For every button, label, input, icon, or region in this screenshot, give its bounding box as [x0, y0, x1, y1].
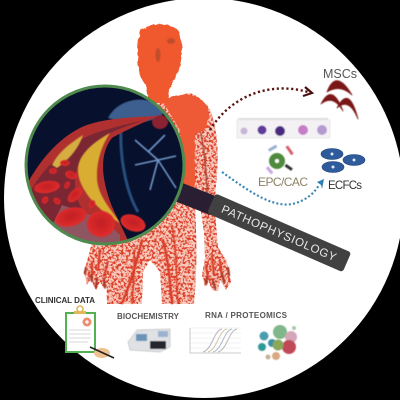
lens scene — [28, 88, 182, 242]
RNA / proteomics label: RNA / PROTEOMICS — [205, 311, 288, 320]
dotted arrow: to MSCs — [210, 87, 312, 130]
icon: ECFC cells — [321, 148, 365, 172]
human vascular figure — [84, 25, 231, 304]
magnifier lens — [20, 85, 190, 250]
icon: biochemistry analyser — [128, 329, 170, 352]
blood vessel wall — [26, 116, 158, 250]
magnifier handle — [172, 182, 218, 215]
icon: EPC/CAC cell — [266, 145, 294, 174]
body veins — [84, 93, 231, 304]
vessel lumen — [32, 120, 144, 222]
pathophysiology label — [207, 193, 351, 272]
icon: clipboard — [66, 306, 114, 358]
biochemistry label: BIOCHEMISTRY — [117, 312, 180, 321]
icon: proteomics network — [258, 325, 297, 360]
chart: amplification curves — [190, 328, 241, 353]
lower lumen tint — [54, 205, 120, 242]
head and neck — [138, 25, 182, 103]
shoulder mass — [163, 94, 210, 190]
pathophysiology label: PATHOPHYSIOLOGY — [219, 203, 338, 264]
MSCs label: MSCs — [323, 67, 357, 81]
icon: MSC cells — [321, 81, 358, 119]
red blood cells — [33, 160, 148, 237]
body base tint — [84, 93, 231, 304]
blood cell micrograph panel — [237, 118, 330, 138]
EPC/CAC label: EPC/CAC — [258, 175, 308, 189]
clinical data label: CLINICAL DATA — [35, 296, 95, 305]
ECFCs label: ECFCs — [328, 180, 362, 192]
plaque — [78, 133, 120, 223]
blue vessels — [108, 100, 176, 212]
dotted arrow: to ECFCs — [222, 172, 324, 205]
main vessels — [85, 130, 229, 303]
lens rim — [26, 86, 184, 244]
facial shadows — [156, 38, 175, 62]
